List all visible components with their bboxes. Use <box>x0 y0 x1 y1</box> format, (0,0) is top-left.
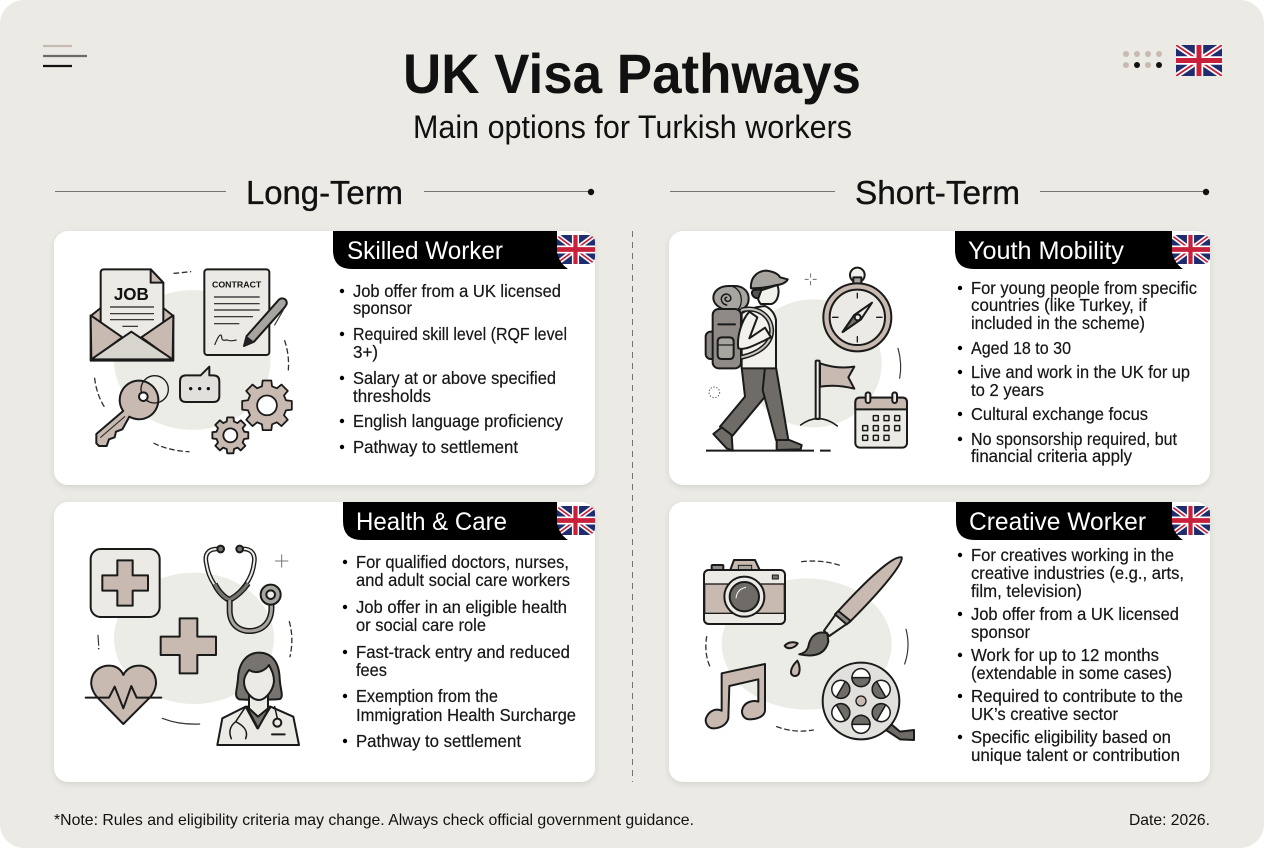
illustration: camera, brush, note, film reel <box>704 557 914 740</box>
bullet list: Creative Worker <box>958 545 1184 765</box>
panel: Skilled Worker <box>54 231 595 485</box>
icon: UK flag top right <box>1176 45 1222 76</box>
bullet list: Youth Mobility: countries (like Turkey, if <box>971 295 1147 315</box>
bullet list: Skilled Worker: Job offer from a UK licensed <box>353 281 561 301</box>
bullet list: Health & Care: Fast-track entry and reduced <box>356 642 570 662</box>
bullet list: Health & Care: fees <box>356 660 387 680</box>
bullet list: Skilled Worker <box>340 281 567 457</box>
bullet list: Youth Mobility: to 2 years <box>971 380 1044 400</box>
panel: Creative Worker <box>669 502 1210 782</box>
bullet list: Youth Mobility: included in the scheme) <box>971 313 1145 333</box>
header: Skilled Worker <box>333 231 568 269</box>
icon: menu lines <box>43 46 87 66</box>
badge: UK flag <box>1171 506 1210 535</box>
bullet list: Youth Mobility <box>958 278 1197 466</box>
bullet list: Skilled Worker: English language proficiency <box>353 411 563 431</box>
bullet list: Youth Mobility: For young people from specific <box>971 278 1197 298</box>
bullet list: Creative Worker: film, television) <box>971 581 1082 601</box>
bullet list: Health & Care: For qualified doctors, nurses, <box>356 552 569 572</box>
title: UK Visa Pathways <box>403 42 861 105</box>
illustration: backpacker, compass, flag, calendar <box>706 268 907 451</box>
header: Skilled Worker: Skilled Worker <box>347 237 503 265</box>
heading: Long-Term <box>55 174 594 211</box>
bullet list: Skilled Worker: sponsor <box>353 298 412 318</box>
header: Youth Mobility: Youth Mobility <box>968 237 1124 265</box>
subtitle: Main options for Turkish workers <box>413 109 852 145</box>
illustration: job, contract, key, gears <box>91 269 292 453</box>
bullet list: Health & Care: or social care role <box>356 615 486 635</box>
bullet list: Health & Care: Pathway to settlement <box>356 731 521 751</box>
bullet list: Creative Worker: Required to contribute to the <box>971 686 1183 706</box>
illustration: job, contract, key, gears: CONTRACT <box>212 279 261 289</box>
bullet list: Health & Care: Job offer in an eligible health <box>356 597 567 617</box>
bullet list: Creative Worker: (extendable in some cases) <box>971 663 1172 683</box>
bullet list: Creative Worker: Job offer from a UK licensed <box>971 604 1179 624</box>
illustration: job, contract, key, gears: JOB <box>114 284 149 304</box>
bullet list: Skilled Worker: Salary at or above specified <box>353 368 556 388</box>
panel: Youth Mobility <box>669 231 1210 485</box>
badge: UK flag <box>556 506 595 535</box>
bullet list: Creative Worker: UK’s creative sector <box>971 704 1118 724</box>
heading: Long-Term: Long-Term <box>246 174 403 211</box>
bullet list: Creative Worker: unique talent or contribution <box>971 745 1180 765</box>
bullet list: Youth Mobility: Live and work in the UK for up <box>971 362 1190 382</box>
bullet list: Creative Worker: Work for up to 12 months <box>971 645 1159 665</box>
badge: UK flag <box>1171 235 1210 264</box>
bullet list: Youth Mobility: Cultural exchange focus <box>971 404 1148 424</box>
bullet list: Youth Mobility: Aged 18 to 30 <box>971 338 1071 358</box>
heading: Short-Term: Short-Term <box>855 174 1020 211</box>
bullet list: Health & Care: and adult social care workers <box>356 570 570 590</box>
bullet list: Creative Worker: creative industries (e.g., arts, <box>971 563 1184 583</box>
illustration: medical icons <box>86 546 299 745</box>
bullet list: Creative Worker: For creatives working in the <box>971 545 1174 565</box>
header: Youth Mobility <box>955 231 1183 269</box>
date: Date: 2026. <box>1129 812 1210 829</box>
badge: UK flag <box>556 235 595 264</box>
heading: Short-Term <box>670 174 1209 211</box>
bullet list: Skilled Worker: thresholds <box>353 386 431 406</box>
header: Health & Care <box>343 502 568 540</box>
bullet list: Skilled Worker: 3+) <box>353 342 378 362</box>
bullet list: Skilled Worker: Required skill level (RQF level <box>353 324 567 344</box>
bullet list: Creative Worker: sponsor <box>971 622 1030 642</box>
header: Creative Worker: Creative Worker <box>969 508 1146 536</box>
footnote: *Note: Rules and eligibility criteria may change. Always check official government guidance. <box>54 812 694 829</box>
bullet list: Youth Mobility: No sponsorship required, but <box>971 429 1177 449</box>
bullet list: Health & Care: Exemption from the <box>356 686 498 706</box>
bullet list: Creative Worker: Specific eligibility based on <box>971 727 1171 747</box>
header: Creative Worker <box>956 502 1183 540</box>
bullet list: Health & Care <box>343 552 576 751</box>
header: Health & Care: Health & Care <box>356 508 507 536</box>
bullet list: Skilled Worker: Pathway to settlement <box>353 437 518 457</box>
bullet list: Youth Mobility: financial criteria apply <box>971 446 1132 466</box>
panel: Health & Care <box>54 502 595 782</box>
icon: decorative dots <box>1123 51 1162 68</box>
bullet list: Health & Care: Immigration Health Surcharge <box>356 705 576 725</box>
